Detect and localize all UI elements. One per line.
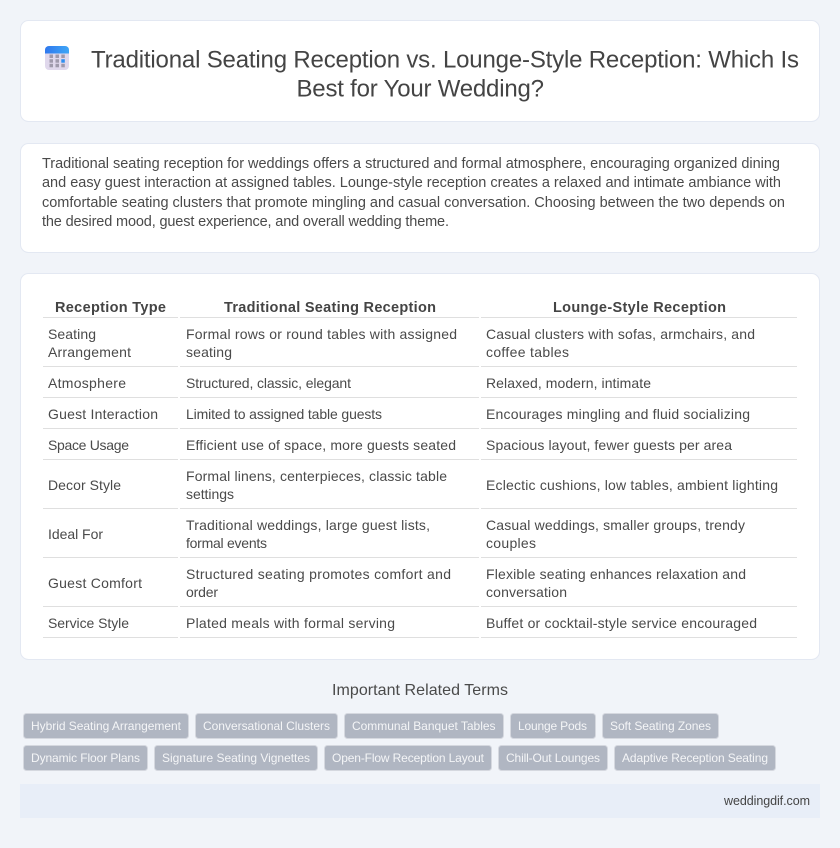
row: space usage: Space Usage xyxy=(48,437,129,453)
icon: calendar xyxy=(45,46,69,70)
panel: introduction xyxy=(20,144,820,252)
related terms tags: Signature Seating Vignettes xyxy=(162,751,310,765)
row: service style: Service Style xyxy=(48,615,129,631)
row: atmosphere: Structured, classic, elegant xyxy=(186,375,351,391)
row: atmosphere xyxy=(48,375,651,391)
row: decor style: Eclectic cushions, low tables, ambient lighting xyxy=(486,477,778,493)
row: ideal for: couples xyxy=(486,535,536,551)
footer: weddingdif.com xyxy=(723,794,810,808)
row: service style: Plated meals with formal serving xyxy=(186,615,395,631)
row: atmosphere: Atmosphere xyxy=(48,375,126,391)
row: guest comfort: Structured seating promotes comfort and xyxy=(186,566,451,582)
table header: Lounge-Style Reception xyxy=(553,300,726,316)
related terms tags: Lounge Pods xyxy=(518,719,587,733)
row: space usage: Spacious layout, fewer guests per area xyxy=(486,437,732,453)
table header: Reception Type xyxy=(55,300,166,316)
intro text xyxy=(42,156,785,230)
panel: title xyxy=(20,20,820,122)
row: ideal for: Ideal For xyxy=(48,526,103,542)
row: ideal for: Casual weddings, smaller groups, trendy xyxy=(486,517,745,533)
row: decor style: Formal linens, centerpieces, classic table xyxy=(186,468,447,484)
row: seating arrangement: Seating xyxy=(48,326,96,342)
footer xyxy=(20,784,820,818)
row: seating arrangement xyxy=(48,326,755,360)
row: guest interaction: Limited to assigned table guests xyxy=(186,406,382,422)
row: space usage: Efficient use of space, more guests seated xyxy=(186,437,456,453)
row: seating arrangement: seating xyxy=(186,344,232,360)
related terms tags: Hybrid Seating Arrangement xyxy=(31,719,182,733)
title heading: Traditional Seating Reception vs. Lounge-Style Reception: Which Is xyxy=(91,46,799,74)
row: guest interaction: Encourages mingling and fluid socializing xyxy=(486,406,750,422)
related terms tags xyxy=(24,714,776,770)
row: decor style: settings xyxy=(186,486,234,502)
row: seating arrangement: Arrangement xyxy=(48,344,131,360)
row: seating arrangement: Casual clusters with sofas, armchairs, and xyxy=(486,326,755,342)
row: guest comfort xyxy=(48,566,746,600)
intro text: the desired mood, guest experience, and overall wedding theme. xyxy=(42,214,449,230)
table header: Traditional Seating Reception xyxy=(224,300,436,316)
intro text: and easy guest interaction at assigned tables. Lounge-style reception creates a relaxed and intimate ambiance with xyxy=(42,175,781,191)
row: service style xyxy=(48,615,757,631)
intro text: Traditional seating reception for weddings offers a structured and formal atmosphere, encouraging organized dining xyxy=(42,156,780,172)
related terms tags: Adaptive Reception Seating xyxy=(622,751,768,765)
related terms tags: Conversational Clusters xyxy=(203,719,330,733)
title heading xyxy=(91,46,799,102)
row: decor style: Decor Style xyxy=(48,477,121,493)
table header xyxy=(55,300,726,316)
related terms tags: Communal Banquet Tables xyxy=(352,719,496,733)
row: guest interaction xyxy=(48,406,750,422)
related terms tags: Dynamic Floor Plans xyxy=(31,751,140,765)
row: atmosphere: Relaxed, modern, intimate xyxy=(486,375,651,391)
panel: comparison table xyxy=(20,274,820,660)
title heading: Best for Your Wedding? xyxy=(296,76,544,102)
intro text: comfortable seating clusters that promote mingling and casual conversation. Choosing between the two depends on xyxy=(42,195,785,211)
related terms tags: Chill-Out Lounges xyxy=(506,751,600,765)
related terms tags: Soft Seating Zones xyxy=(610,719,711,733)
row: guest interaction: Guest Interaction xyxy=(48,406,158,422)
related terms tags: Open-Flow Reception Layout xyxy=(332,751,485,765)
row: guest comfort: conversation xyxy=(486,584,567,600)
row: ideal for xyxy=(48,517,745,551)
row: guest comfort: Flexible seating enhances relaxation and xyxy=(486,566,746,582)
row: space usage xyxy=(48,437,732,453)
row: ideal for: Traditional weddings, large guest lists, xyxy=(186,517,430,533)
row: seating arrangement: Formal rows or round tables with assigned xyxy=(186,326,457,342)
row: guest comfort: order xyxy=(186,584,218,600)
row: service style: Buffet or cocktail-style service encouraged xyxy=(486,615,757,631)
related terms heading: Important Related Terms xyxy=(332,682,508,699)
row: seating arrangement: coffee tables xyxy=(486,344,569,360)
row: ideal for: formal events xyxy=(186,535,267,551)
row: guest comfort: Guest Comfort xyxy=(48,575,142,591)
row: decor style xyxy=(48,468,778,502)
